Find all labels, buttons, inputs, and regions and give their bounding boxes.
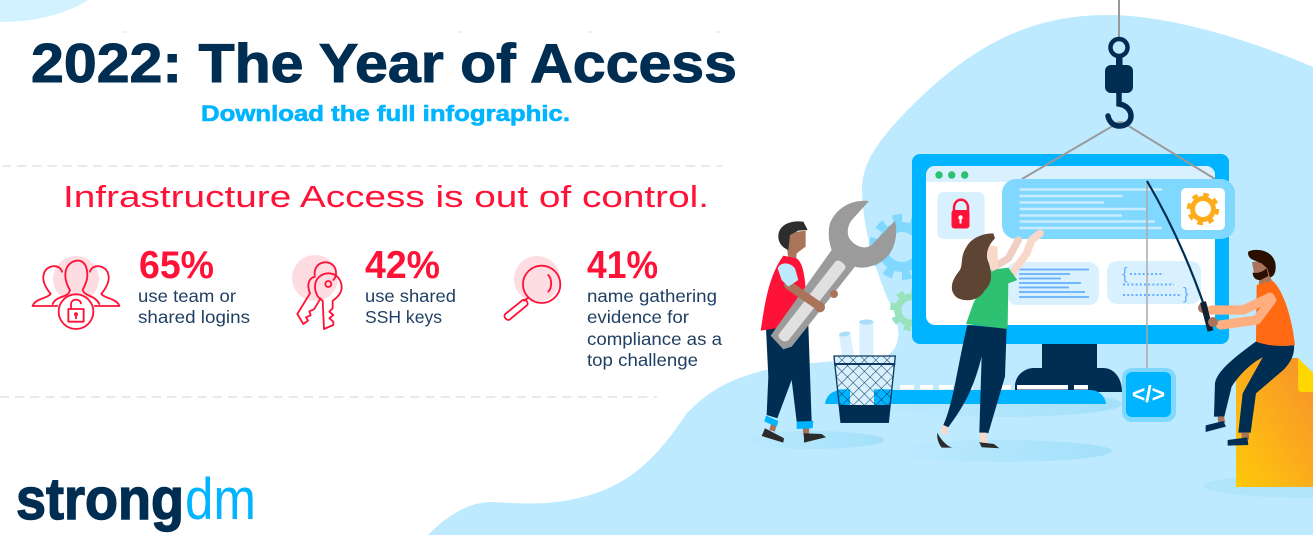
description: evidence for	[587, 307, 689, 327]
person with wrench	[761, 201, 896, 443]
description: use team or	[138, 286, 236, 306]
code panel right: {	[1122, 264, 1128, 283]
waste basket	[834, 356, 895, 422]
value 65%: 65%	[139, 244, 214, 287]
lock tile	[938, 192, 984, 239]
code panel right: }	[1183, 284, 1189, 303]
description: name gathering	[587, 286, 717, 306]
subtitle link: Download the full infographic.	[201, 101, 570, 126]
gear tile	[1181, 188, 1225, 230]
logo: strongdm: dm	[185, 467, 256, 532]
browser title bar	[926, 166, 1215, 182]
description: SSH keys	[365, 307, 442, 327]
screen	[926, 166, 1215, 325]
value 41%: 41%	[587, 244, 658, 287]
description: shared logins	[138, 307, 250, 327]
background blob	[428, 15, 1313, 535]
description	[365, 286, 456, 327]
fishing rod	[1147, 181, 1218, 331]
code panel left	[1007, 262, 1099, 305]
woman reaching up	[937, 233, 1040, 448]
monitor stand	[1015, 340, 1122, 392]
stat: 41%	[505, 244, 722, 370]
description: compliance as a	[587, 329, 722, 349]
icon: team with padlock	[33, 256, 119, 329]
stray specks	[123, 31, 720, 33]
ground shadows	[736, 391, 1313, 498]
logo: strongdm: strong	[16, 467, 184, 532]
monitor	[912, 154, 1229, 344]
description	[138, 286, 250, 327]
description: top challenge	[587, 350, 698, 370]
value 42%: 42%	[365, 244, 440, 287]
code tile on fishing line: </>	[1132, 381, 1165, 407]
icon: blue gear	[873, 218, 931, 276]
icon: keys	[292, 255, 342, 329]
description: use shared	[365, 286, 456, 306]
stat: 65%	[33, 244, 250, 329]
tubes behind basket	[839, 319, 873, 360]
code panel right	[1107, 261, 1201, 304]
keyboard	[825, 385, 1106, 404]
decorative corner blob	[0, 0, 88, 22]
icon: green gear	[892, 292, 930, 328]
crane hook and ropes	[1022, 0, 1215, 179]
floating config panel	[1002, 179, 1235, 239]
code tile on fishing line	[1122, 181, 1176, 422]
fisherman on folder	[1206, 250, 1295, 446]
title: 2022: The Year of Access	[31, 32, 737, 94]
stat: 42%	[292, 244, 456, 329]
folder document seat	[1236, 358, 1313, 487]
icon: magnifying glass	[505, 256, 560, 320]
description	[587, 286, 722, 370]
heading: infrastructure access: Infrastructure Access is out of control.	[63, 179, 709, 214]
